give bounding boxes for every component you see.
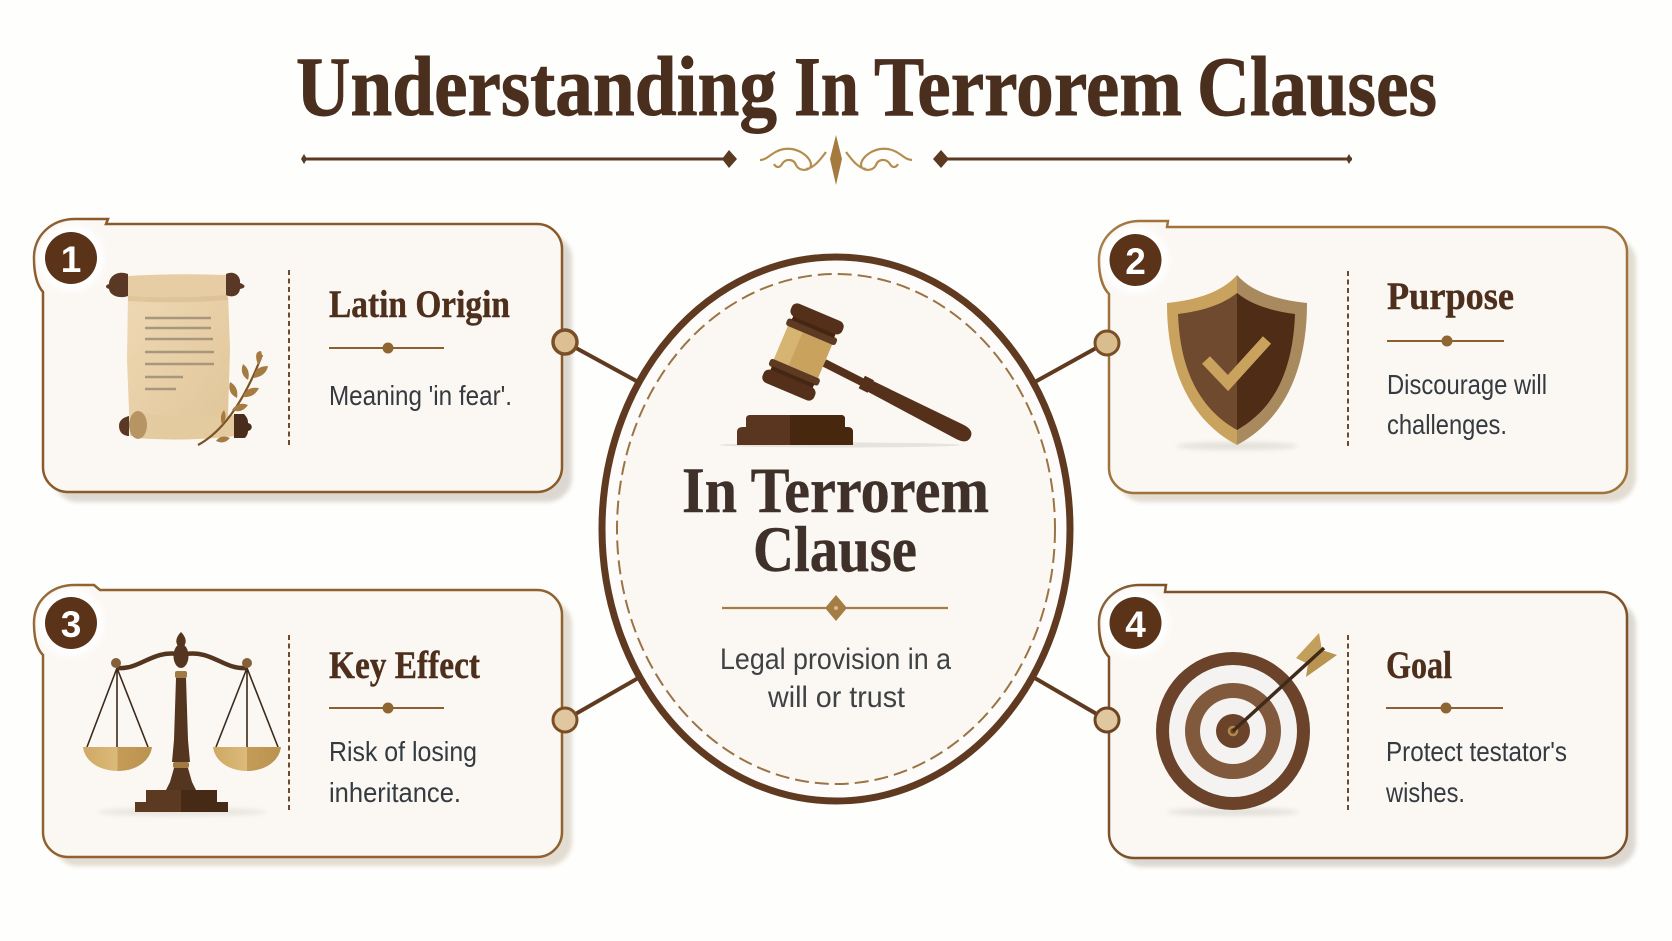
panel: 2 Purpose — [1095, 221, 1636, 502]
small rule — [1386, 702, 1503, 714]
connector dot 1 — [553, 330, 577, 354]
panel: central ellipse — [602, 257, 1070, 801]
small rule — [329, 702, 444, 714]
vertical dashed divider — [1347, 271, 1349, 447]
title: In — [794, 40, 859, 134]
central heading: Clause — [753, 514, 917, 586]
title: Clauses — [1197, 40, 1437, 134]
text: description — [1387, 369, 1547, 440]
vertical dashed divider — [288, 635, 290, 813]
panel: 3 Key Effect — [34, 585, 577, 866]
number badge 1 — [45, 232, 97, 284]
heading: Latin Origin: Latin Origin — [329, 283, 510, 326]
number badge 2 — [1110, 234, 1162, 286]
central description: Legal provision in a — [720, 643, 951, 676]
vertical dashed divider — [1347, 635, 1349, 813]
number badge 3: 3 — [61, 604, 81, 645]
text: description: Discourage will — [1387, 369, 1547, 400]
central description: will or trust — [767, 681, 906, 714]
small rule — [1387, 336, 1504, 346]
title ornament divider — [301, 135, 1352, 185]
central ornament rule — [722, 595, 948, 621]
icon: scroll — [106, 273, 268, 445]
panel: 4 Goal — [1095, 585, 1636, 867]
heading: Key Effect: Key Effect — [329, 644, 480, 687]
connector dot 3 — [553, 708, 577, 732]
number badge 4 — [1110, 597, 1162, 649]
text: description: Risk of losing — [329, 736, 477, 767]
heading: Purpose: Purpose — [1387, 275, 1514, 318]
icon: shield with check — [1167, 275, 1307, 450]
title — [296, 40, 1437, 134]
icon: gavel — [720, 301, 974, 448]
title: Understanding — [296, 40, 777, 134]
connector dot 4 — [1095, 708, 1119, 732]
panel: 1 Latin Origin — [34, 219, 577, 502]
connector dot 2 — [1095, 331, 1119, 355]
number badge 2: 2 — [1125, 241, 1146, 282]
text: description — [329, 736, 477, 808]
text: description: Meaning 'in fear'. — [329, 380, 512, 411]
vertical dashed divider — [288, 270, 290, 447]
central description — [720, 643, 951, 714]
number badge 3 — [45, 597, 97, 649]
text: description: Protect testator's — [1386, 736, 1567, 767]
title: Terrorem — [874, 40, 1182, 134]
number badge 1: 1 — [61, 239, 81, 280]
heading: Goal: Goal — [1386, 644, 1452, 687]
text: description: inheritance. — [329, 777, 461, 808]
connector lines — [565, 342, 1107, 720]
icon: balance scales — [83, 632, 281, 816]
number badge 4: 4 — [1125, 604, 1146, 645]
small rule — [329, 342, 444, 354]
text: description — [1385, 736, 1567, 808]
central heading: In Terrorem — [682, 455, 989, 527]
text: description: wishes. — [1385, 777, 1465, 808]
central heading — [682, 455, 989, 586]
icon: target with arrow — [1156, 633, 1337, 816]
text: description: challenges. — [1387, 409, 1507, 440]
